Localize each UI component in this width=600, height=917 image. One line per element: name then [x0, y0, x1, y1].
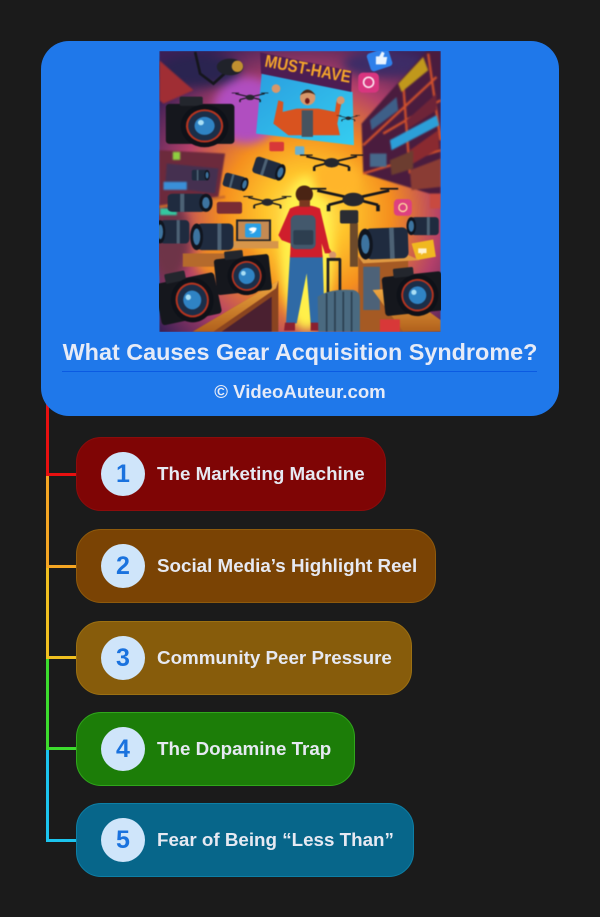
item 2: Social Media's Highlight Reel [76, 529, 436, 603]
item 1: The Marketing Machine [76, 437, 386, 511]
suitcase [318, 259, 360, 332]
hoodie [278, 205, 333, 257]
sign: must-have banner: MUST-HAVE [263, 51, 353, 87]
credit: © VideoAuteur.com [214, 381, 386, 402]
item 4: The Dopamine Trap: The Dopamine Trap [157, 738, 331, 759]
furniture: wooden counters [183, 219, 440, 332]
backpack [291, 215, 316, 249]
social icons [269, 47, 436, 260]
item 3: Community Peer Pressure: Community Peer Pressure [157, 647, 392, 668]
title: What Causes Gear Acquisition Syndrome? [63, 339, 537, 365]
scene artwork [150, 47, 446, 332]
photographer from behind [278, 186, 336, 331]
jeans [286, 255, 325, 323]
item 1: The Marketing Machine: 1 [116, 460, 130, 488]
item 2: Social Media's Highlight Reel: Social Media’s Highlight Reel [157, 555, 417, 576]
wall screen [256, 51, 354, 145]
divider [62, 371, 537, 372]
panel: header card [41, 41, 559, 416]
illustration: photographer surrounded by camera gear in a store [159, 51, 441, 332]
man on screen [272, 84, 345, 137]
item 3: Community Peer Pressure [76, 621, 412, 695]
item 5: Fear of Being "Less Than": 5 [116, 826, 130, 854]
cameras and lenses [152, 97, 446, 329]
left shelves [160, 60, 225, 215]
connector: vertical timeline and branches [46, 404, 76, 842]
item 2: Social Media's Highlight Reel: 2 [116, 552, 130, 580]
shoes [284, 323, 320, 331]
item 5: Fear of Being "Less Than": Fear of Being “Less Than” [157, 829, 394, 850]
drones [195, 52, 398, 267]
right shelves [362, 51, 440, 208]
item 1: The Marketing Machine: The Marketing Machine [157, 463, 365, 484]
hand [329, 251, 336, 259]
glow: haze and light column [150, 50, 423, 330]
item 4: The Dopamine Trap [76, 712, 355, 786]
item 3: Community Peer Pressure: 3 [116, 644, 130, 672]
item 4: The Dopamine Trap: 4 [116, 735, 130, 763]
item 5: Fear of Being "Less Than" [76, 803, 414, 877]
head [296, 186, 313, 203]
scene background glow [160, 51, 440, 332]
